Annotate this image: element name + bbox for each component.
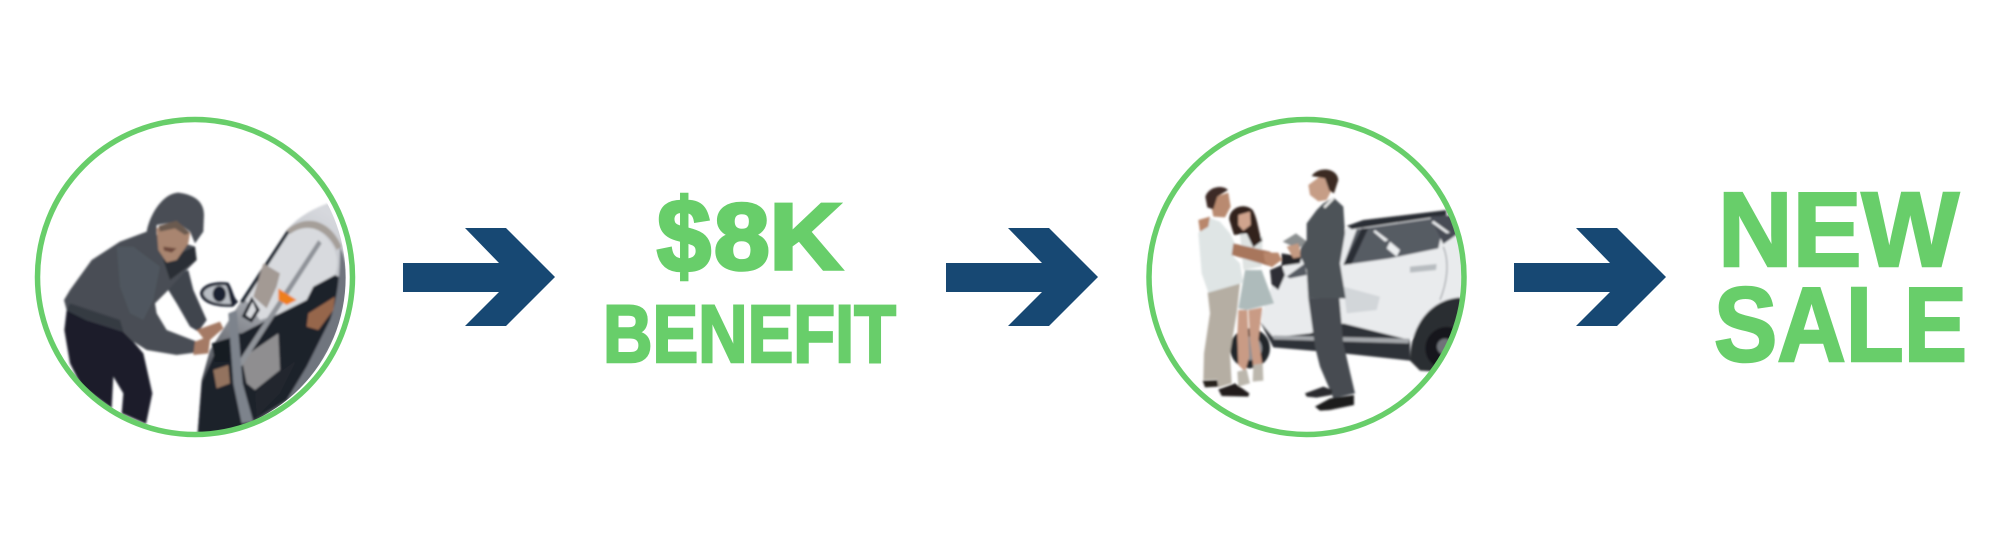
panel: car sale photo [1149, 120, 1468, 434]
label: BENEFIT: BENEFIT [603, 289, 896, 380]
circle outline [1149, 120, 1464, 434]
panel: new sale text [1714, 171, 1967, 384]
arrow: first [403, 228, 555, 326]
photo: couple shaking hands with salesman beside car [1198, 169, 1468, 411]
arrow: second [946, 228, 1098, 326]
infographic: theft to new sale flow [34, 116, 1964, 438]
arrow: third [1514, 228, 1666, 326]
circle outline [38, 120, 352, 434]
heading: $8K: 8K [714, 184, 842, 289]
panel: car thief photo [38, 120, 353, 434]
heading: $8K: $ [657, 179, 711, 295]
photo: thief at car door [64, 193, 353, 433]
panel: $8K benefit text [603, 179, 896, 380]
heading: SALE: SALE [1714, 266, 1967, 384]
heading: NEW: NEW [1718, 171, 1959, 289]
